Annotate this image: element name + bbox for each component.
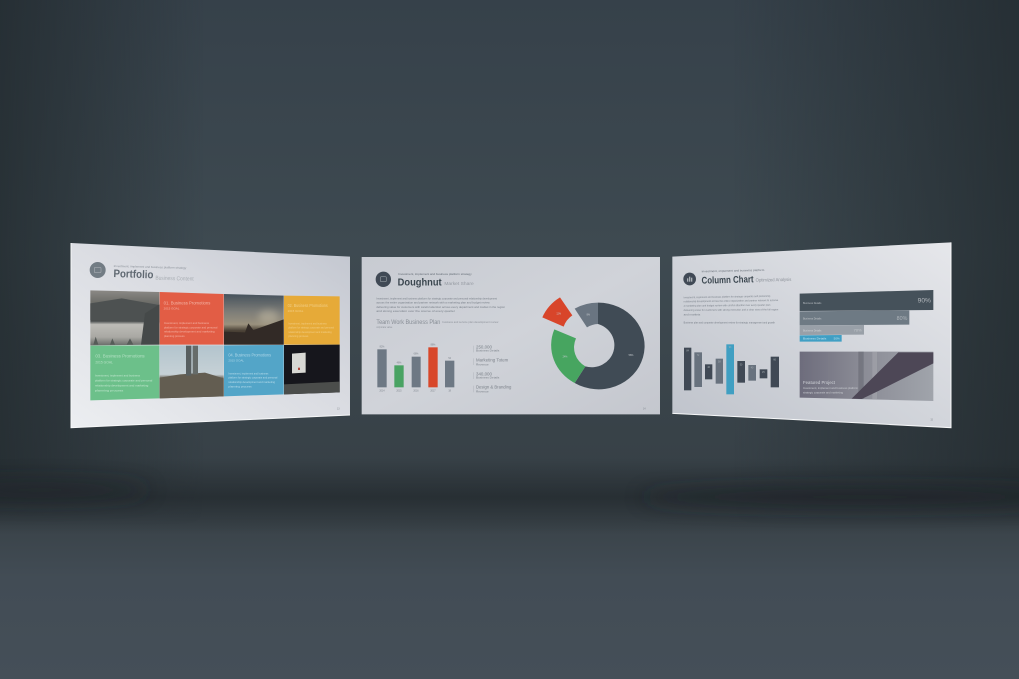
bar chart: 82% [380,347,384,349]
card: blue promotion: 04. Business Promotions [228,352,271,357]
column chart: 84 [686,350,690,352]
bar: 90%: Business Details [803,302,822,305]
column chart: 50 [740,365,743,367]
text: featured project [803,380,858,395]
column chart [684,344,779,394]
text: featured project: strategic corporate and marketing [803,392,844,395]
doughnut chart [542,297,645,389]
bar chart: 18 [448,391,452,393]
column chart: 72 [697,355,700,357]
photo: hiker on rocks [160,345,224,398]
bar chart: 54 [448,358,452,360]
card: blue promotion: platform for strategic corporate and personal [228,377,278,380]
segment: slate share [575,303,598,327]
bar chart [377,345,454,393]
column chart: 40 [751,367,754,369]
card: green promotion: 2015 GOAL [95,361,113,365]
card: red promotion: 2015 GOAL [164,307,180,311]
bar: 70%: Business Details [803,329,822,332]
bar chart: 2016 [413,391,419,393]
subheading: team work: Team Work Business Plan [376,320,440,326]
text block: intro: a marketing plan and budget review with careful attention over every quarter plan [684,304,771,308]
card: amber promotion: Investment, implement and business [288,322,328,325]
segment: exploded red share [542,297,572,327]
bar chart: 66% [414,354,418,356]
heading: column chart: Optimized Analysis [756,277,792,283]
card: red promotion: platform for strategic corporate and personal [164,326,218,329]
bar: 80% [800,310,909,325]
text block: intro [376,296,506,313]
card: green promotion [90,345,159,400]
segment: green share [551,329,585,383]
text block: intro: relationship development across the entire organization and partner network to achieve [684,299,779,303]
heading: column chart [701,268,792,287]
card: blue promotion: Investment, implement and business [228,372,269,375]
subheading: team work: corporate value [376,326,393,329]
card: green promotion: Investment, implement and business [95,375,141,378]
column chart: 66 [773,359,777,361]
text block: intro [684,295,779,325]
photo: mountain lake [90,290,159,345]
doughnut chart: 8% [587,315,590,317]
bar chart: 2015 [396,391,402,393]
column chart: 25 [762,372,765,374]
legend list: Business Details [476,350,500,353]
photo: bridge feature [800,352,933,401]
heading: column chart: Column Chart [701,274,754,287]
card: red promotion: planning process [164,335,185,338]
card: amber promotion: 02. Business Promotions [288,303,328,308]
text block: intro: delivering value for customers with careful attention across every department and market in the region [376,305,506,309]
page number: 15 [930,419,934,421]
progress bars [800,290,933,342]
bar: 70% [800,325,864,335]
text block: intro: Business plan and corporate development review for strategic management and growth [684,322,776,325]
heading: portfolio: Portfolio [113,268,154,281]
heading: portfolio: Investment, implement and business platform strategy [114,264,187,270]
card: blue promotion: planning process [228,385,253,388]
heading: doughnut: Investment, implement and business platform strategy [398,272,472,276]
text: featured project: Investment, implement and business platform [803,387,858,390]
text block: intro: across the entire organization and partner network with a marketing plan and budget review [376,301,490,305]
text block: intro: and markets [684,314,701,317]
icon: chart badge [683,273,696,285]
doughnut chart: 12% [556,314,561,316]
heading: doughnut [398,272,474,288]
card: red promotion: Investment, implement and business [164,322,210,325]
heading: doughnut: Doughnut [398,277,442,288]
bar chart: 2017 [430,391,436,393]
card: green promotion: relationship development and marketing [95,385,149,388]
bar: 90% [800,290,933,311]
icon: doughnut badge [376,272,391,287]
column chart: 93 [729,347,732,349]
legend list: Revenue [476,391,490,393]
card: green promotion: platform for strategic corporate and personal [95,380,153,383]
text block: intro: Investment, implement and business platform for strategic corporate and personal relationship development [376,296,497,300]
bar: 90%: 90% [918,298,931,305]
heading: column chart: Investment, implement and business platform [702,268,765,273]
bar: 50% [800,335,842,342]
panel: column chart slide [672,242,951,428]
bar: 80%: Business Details [803,318,822,321]
bar: 70%: 70% [854,328,862,333]
card: amber promotion: 2015 GOAL [288,309,304,313]
card: blue promotion [224,345,284,396]
card: amber promotion: planning process [288,335,309,338]
bar chart: 46% [397,362,401,364]
bar chart: 2014 [379,391,385,393]
icon: portfolio badge [90,262,106,278]
slide sheet [362,257,660,414]
legend list [473,344,512,393]
subheading: team work: business and service plan development review [442,321,499,324]
bar: 50%: Business Details [803,337,827,340]
slide sheet [672,242,951,428]
heading: portfolio [113,264,194,283]
panel: portfolio slide [71,243,350,428]
card: amber promotion [284,296,340,345]
legend list: Design & Branding [476,385,512,390]
card: amber promotion: relationship development and marketing [288,331,332,334]
card: green promotion: planning process [95,390,124,393]
text: featured project: Featured Project [803,380,836,386]
legend list: 250,000 [476,344,493,349]
photo: sunset coast [224,294,284,345]
column chart: 46 [707,367,711,369]
heading: portfolio: Business Content [155,276,194,283]
legend list: Business Details [476,377,500,380]
slide sheet [71,243,350,428]
card: amber promotion: platform for strategic corporate and personal [288,327,334,330]
doughnut chart: 56% [629,355,633,357]
card: blue promotion: 2015 GOAL [228,359,244,363]
text block: intro: and strong execution over the course of every quarter [376,309,455,313]
legend list: Marketing Totem [476,358,509,363]
card: blue promotion: relationship development and marketing [228,381,276,384]
text block: intro: Investment, implement and business platform for strategic corporate and partnership [684,295,771,299]
bar chart: 88% [431,345,435,347]
segment: dark share [575,303,645,389]
page number: 14 [643,408,646,410]
card: red promotion [160,292,224,345]
card: red promotion: 01. Business Promotions [164,300,211,305]
column chart: 58 [718,361,721,363]
legend list: Revenue [476,364,490,366]
bar: 50%: 50% [834,337,840,341]
subheading: team work [376,320,499,329]
legend list: 340,000 [476,371,493,376]
photo: dark sign [284,345,340,394]
card: green promotion: 03. Business Promotions [95,354,145,359]
heading: doughnut: Market Share [444,281,474,287]
doughnut chart: 24% [563,356,567,358]
bar: 80%: 80% [897,316,908,322]
card: red promotion: relationship development and marketing [164,331,215,334]
page number: 13 [337,409,340,411]
text block: intro: delivering value for customers with strong execution and a clear view of the full region [684,308,779,312]
panel: doughnut slide [362,257,660,414]
